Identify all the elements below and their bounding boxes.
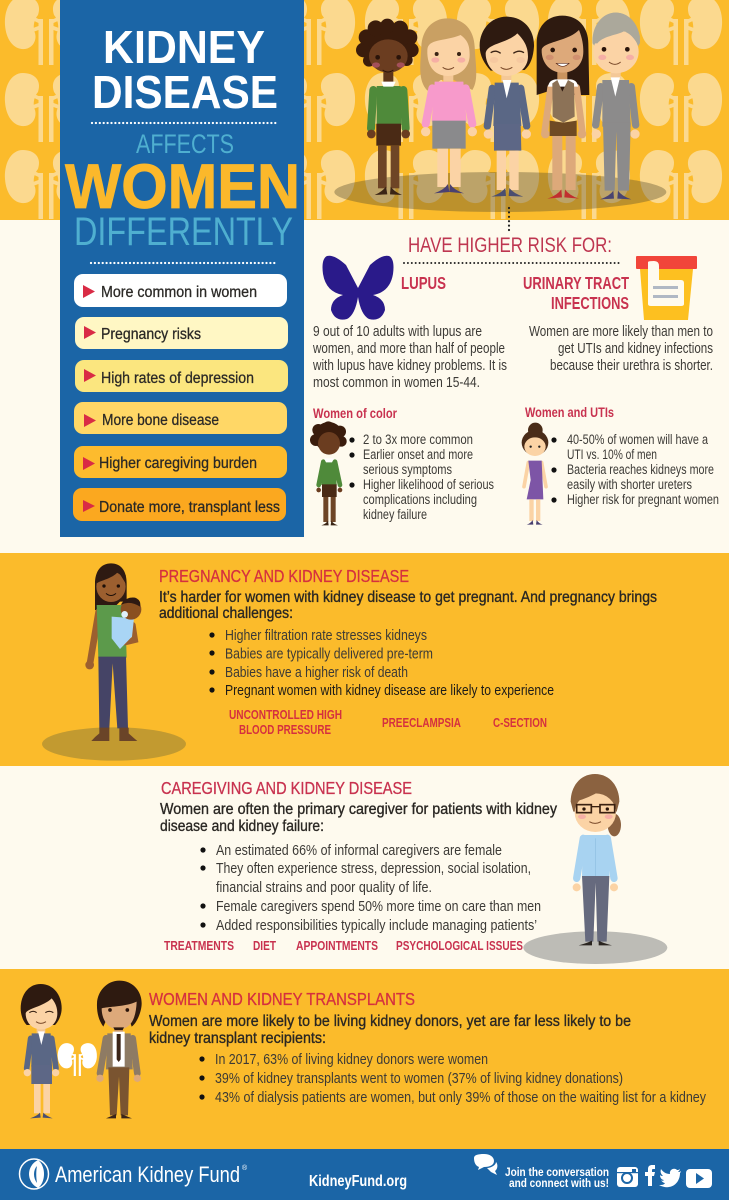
text: UTI description (529, 324, 713, 374)
icon: facebook (645, 1165, 655, 1186)
bullet list: women of color (349, 432, 494, 522)
dotted connector (508, 208, 510, 233)
bullet list: women and UTIs: easily with shorter ureters (567, 477, 692, 492)
woman donor (21, 984, 62, 1118)
item: donate more, transplant less: Donate more, transplant less (99, 499, 280, 516)
bullet list: women of color: complications including (363, 492, 477, 507)
heading: urinary tract infections: URINARY TRACT (523, 273, 629, 293)
item: donate more, transplant less (73, 488, 286, 521)
bullet list: pregnancy challenges (209, 628, 554, 699)
text: transplant intro: Women are more likely to be living kidney donors, yet are far less likely to be (149, 1013, 631, 1030)
heading: have higher risk for: HAVE HIGHER RISK FOR: (408, 234, 612, 257)
item: more bone disease (74, 402, 287, 434)
title: kidney disease (92, 21, 278, 118)
item: more common in women (74, 274, 287, 307)
logo: american kidney fund: ® (242, 1164, 248, 1172)
heading: lupus: LUPUS (401, 273, 446, 293)
logo: american kidney fund: American Kidney Fund (55, 1162, 240, 1187)
text: join the conversation (505, 1165, 609, 1190)
icon: white kidneys (58, 1043, 97, 1076)
woman with black bob in suit (480, 17, 534, 197)
panel: women and kidney transplants (0, 969, 729, 1149)
figures: woman donor, kidney, man recipient (21, 981, 142, 1118)
text: join the conversation: and connect with us! (509, 1176, 609, 1190)
subheading: women and UTIs: Women and UTIs (525, 405, 614, 420)
figure: mother holding baby (42, 563, 186, 761)
label: appointments: APPOINTMENTS (296, 939, 378, 953)
list: six differences (73, 274, 288, 521)
item: pregnancy risks (75, 317, 288, 349)
heading: caregiving and kidney disease: CAREGIVING AND KIDNEY DISEASE (161, 778, 412, 798)
bullet list: pregnancy challenges: Babies are typically delivered pre-term (225, 646, 433, 662)
text: lupus description: 9 out of 10 adults with lupus are (313, 324, 482, 340)
five women illustration (334, 13, 666, 212)
figure: caregiver woman with glasses (523, 774, 667, 964)
bullet list: caregiving facts (200, 843, 541, 934)
figure: woman in purple dress (522, 423, 548, 525)
title: kidney disease: KIDNEY (103, 21, 265, 73)
label: preeclampsia: PREECLAMPSIA (382, 716, 461, 730)
text: caregiving intro (160, 801, 557, 835)
item: high rates of depression: High rates of depression (101, 370, 254, 387)
label: uncontrolled high blood pressure: UNCONTROLLED HIGH (229, 708, 342, 722)
text: lupus description: women, and more than half of people (312, 341, 505, 357)
icon: youtube (686, 1169, 712, 1188)
bullet list: women of color: Higher likelihood of serious (363, 477, 494, 492)
icon: urine sample cup (636, 256, 697, 320)
label: psychological issues: PSYCHOLOGICAL ISSUES (396, 939, 523, 953)
item: pregnancy risks: Pregnancy risks (101, 326, 201, 343)
label: c-section: C-SECTION (493, 716, 547, 730)
bullet list: transplant facts: In 2017, 63% of living kidney donors were women (215, 1052, 488, 1068)
header band with kidney pattern (0, 0, 729, 220)
logo: american kidney fund (20, 1159, 248, 1189)
text: pregnancy intro: It’s harder for women with kidney disease to get pregnant. And pregnancy brings (159, 589, 657, 606)
text: lupus description: most common in women 15-44. (313, 375, 480, 391)
icon: lupus butterfly (322, 256, 394, 320)
text: transplant intro (149, 1013, 631, 1047)
bullet list: women of color: serious symptoms (363, 462, 452, 477)
heading: urinary tract infections: INFECTIONS (551, 293, 629, 313)
bullet list: transplant facts (199, 1052, 707, 1106)
bullet list: women of color: kidney failure (363, 507, 427, 522)
woman with blonde hair (420, 18, 477, 193)
subheading: women of color: Women of color (313, 406, 398, 421)
bullet list: pregnancy challenges: Pregnant women with kidney disease are likely to experience (225, 683, 554, 699)
label: diet: DIET (253, 939, 276, 953)
item: more common in women: More common in women (101, 284, 257, 301)
bullet list: caregiving facts: An estimated 66% of informal caregivers are female (216, 843, 502, 859)
bullet list: pregnancy challenges: Babies have a higher risk of death (225, 665, 408, 681)
heading: women and kidney transplants: WOMEN AND KIDNEY TRANSPLANTS (149, 989, 415, 1009)
title: affects women differently: DIFFERENTLY (74, 210, 293, 254)
item: more bone disease: More bone disease (102, 412, 219, 429)
label: uncontrolled high blood pressure: BLOOD PRESSURE (239, 723, 331, 737)
man recipient (96, 981, 142, 1118)
footer (0, 1149, 729, 1200)
left blue title panel (60, 0, 304, 537)
bullet list: transplant facts: 39% of kidney transplants went to women (37% of living kidney donations) (215, 1071, 623, 1087)
icon: speech bubbles (474, 1154, 497, 1175)
website: kidneyfund.org: KidneyFund.org (309, 1173, 407, 1190)
icon: twitter (659, 1169, 681, 1187)
text: join the conversation: Join the conversation (505, 1165, 609, 1179)
bullet list: caregiving facts: They often experience stress, depression, social isolation, (216, 861, 531, 877)
bullet list: women and UTIs: UTI vs. 10% of men (567, 447, 657, 462)
item: high rates of depression (75, 360, 288, 392)
text: caregiving intro: disease and kidney failure: (160, 818, 324, 835)
title: affects women differently: WOMEN (65, 152, 300, 222)
text: lupus description: with lupus have kidney problems. It is (312, 358, 507, 374)
bullet list: pregnancy challenges: Higher filtration rate stresses kidneys (225, 628, 427, 644)
panel: caregiving and kidney disease (160, 774, 667, 964)
bullet list: caregiving facts: financial strains and poor quality of life. (216, 880, 432, 896)
bullet list: women of color: 2 to 3x more common (363, 432, 473, 447)
text: pregnancy intro (159, 589, 657, 622)
text: caregiving intro: Women are often the primary caregiver for patients with kidney (160, 801, 557, 818)
woman with curly hair (356, 19, 419, 195)
item: higher caregiving burden (74, 446, 287, 478)
item: higher caregiving burden: Higher caregiving burden (99, 455, 257, 472)
text: transplant intro: kidney transplant recipients: (149, 1030, 326, 1047)
title: affects women differently (65, 129, 300, 254)
title: kidney disease: DISEASE (92, 66, 278, 118)
bullet list: women of color: Earlier onset and more (363, 447, 473, 462)
bullet list: women and UTIs (551, 432, 719, 507)
heading: pregnancy and kidney disease: PREGNANCY AND KIDNEY DISEASE (159, 566, 409, 586)
panel: pregnancy and kidney disease (0, 553, 729, 766)
heading: urinary tract infections (523, 273, 629, 313)
older woman with grey hair (592, 13, 640, 199)
text: lupus description (312, 324, 507, 391)
woman with long dark hair (537, 16, 589, 199)
bullet list: caregiving facts: Added responsibilities typically include managing patients’ (216, 918, 537, 934)
label: uncontrolled high blood pressure (229, 708, 342, 737)
icon: instagram (617, 1167, 638, 1187)
figure: woman of color (310, 421, 347, 525)
text: pregnancy intro: additional challenges: (159, 605, 293, 622)
title: affects women differently: AFFECTS (136, 129, 234, 159)
label: treatments: TREATMENTS (164, 939, 234, 953)
bullet list: caregiving facts: Female caregivers spend 50% more time on care than men (216, 899, 541, 915)
